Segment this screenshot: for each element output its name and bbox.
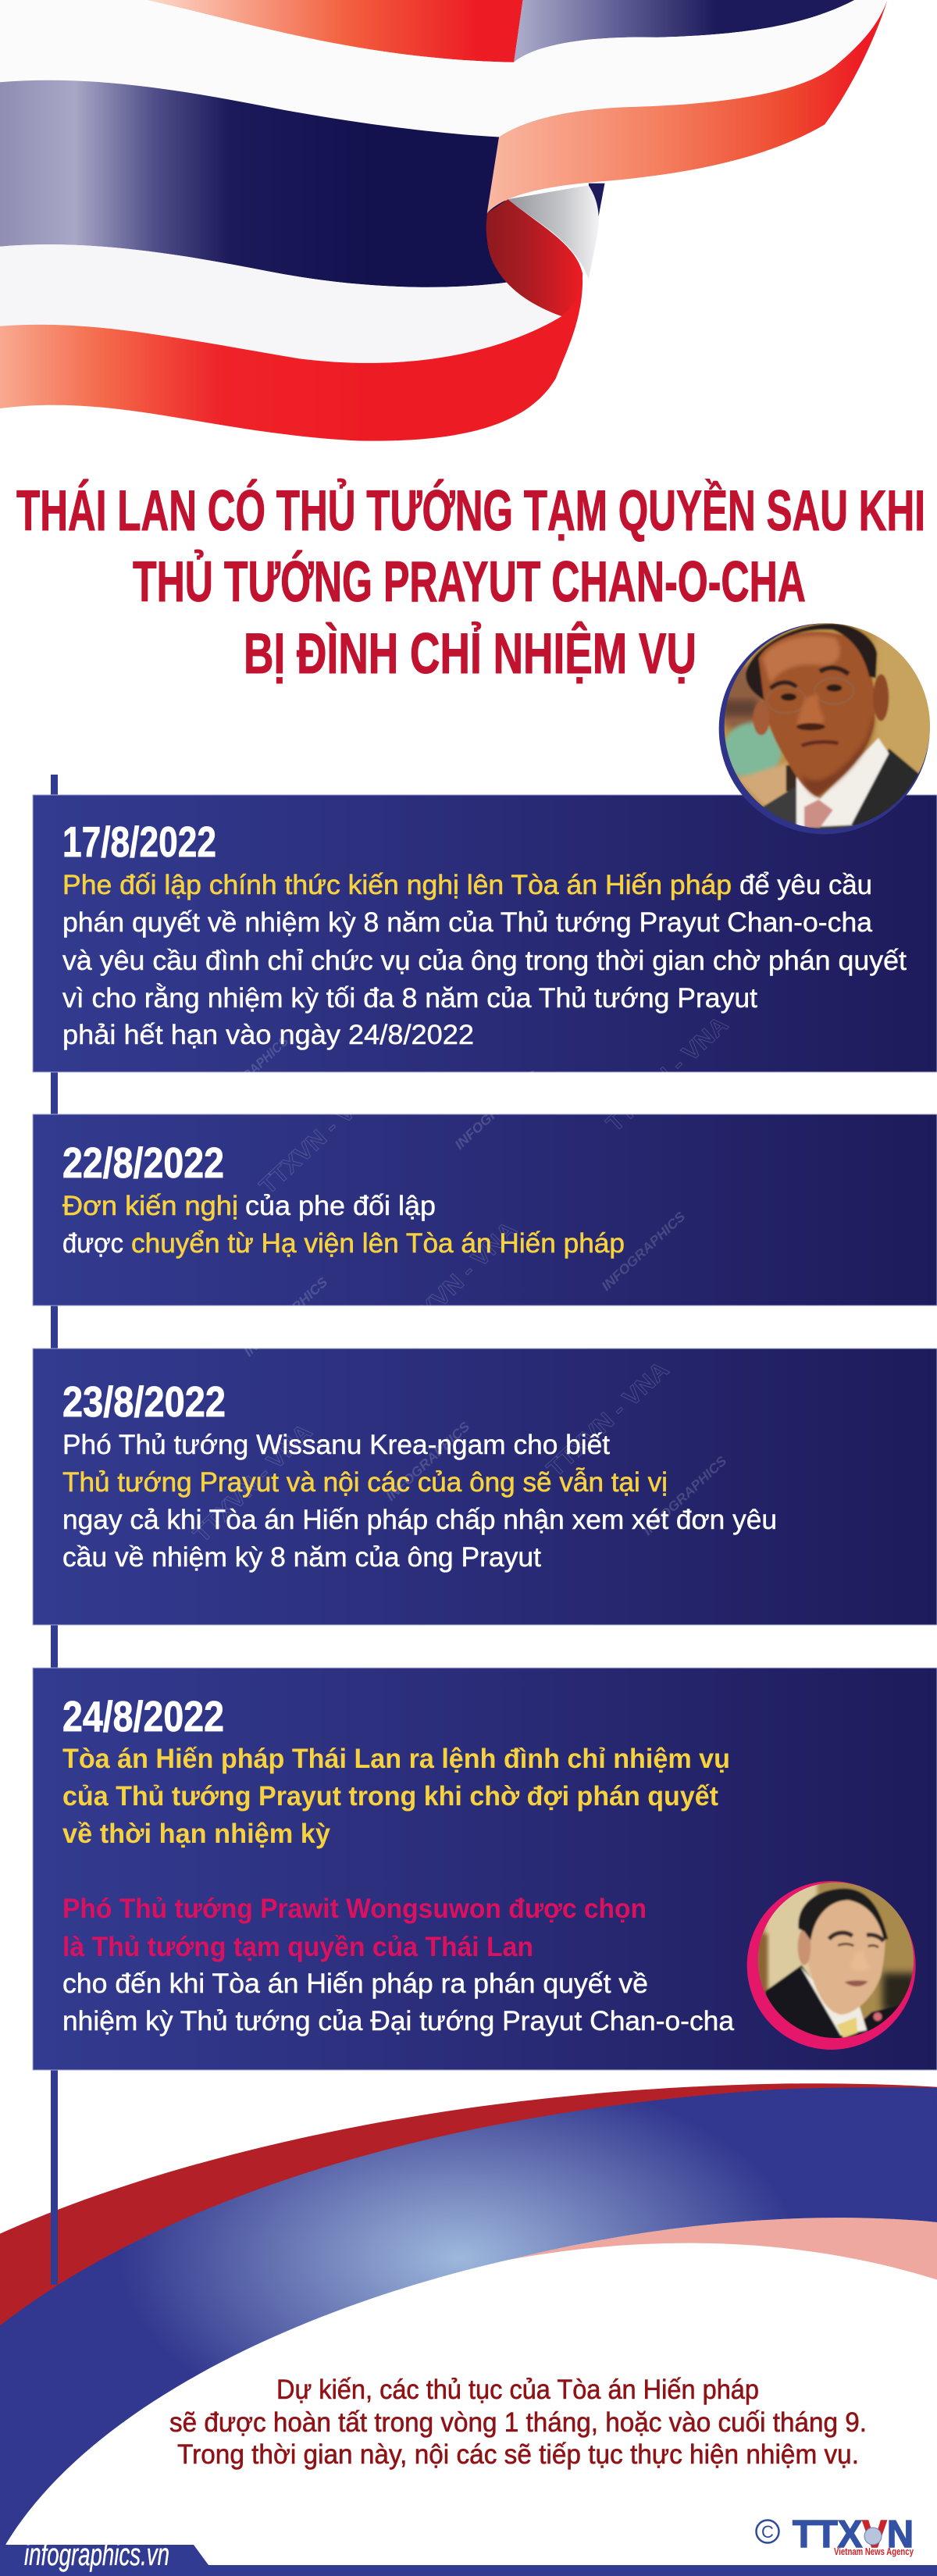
text block: ngay cả khi Tòa án Hiến pháp chấp nhận xem xét đơn yêu bbox=[62, 1505, 777, 1535]
bottom swoosh bbox=[0, 2083, 937, 2576]
footer strip and site label: infographics.vn bbox=[24, 2538, 169, 2572]
date: 24/8/2022 bbox=[62, 1692, 224, 1740]
text block: Phó Thủ tướng Wissanu Krea-ngam cho biết bbox=[62, 1430, 610, 1460]
court order text: của Thủ tướng Prayut trong khi chờ đợi phán quyết bbox=[62, 1781, 718, 1812]
panel: 22/8/2022 bbox=[33, 1114, 937, 1306]
date: 22/8/2022 bbox=[62, 1138, 224, 1187]
panel: 17/8/2022 bbox=[33, 795, 937, 1072]
text block: cầu về nhiệm kỳ 8 năm của ông Prayut bbox=[62, 1542, 541, 1573]
acting prime minister text bbox=[62, 1894, 735, 2036]
acting prime minister text: cho đến khi Tòa án Hiến pháp ra phán quyết về bbox=[62, 1969, 648, 1999]
date: 17/8/2022 bbox=[62, 818, 216, 866]
panel: 24/8/2022 bbox=[33, 1668, 937, 2070]
timeline bar bbox=[51, 775, 58, 2285]
portrait: Prayut Chan-o-cha bbox=[713, 619, 937, 836]
watermarks: INFOGRAPHICS bbox=[452, 1067, 542, 1153]
logo: TTXVN: TTXVN bbox=[793, 2514, 914, 2556]
text block: để yêu cầu bbox=[739, 870, 872, 900]
closing note: Trong thời gian này, nội các sẽ tiếp tục thực hiện nhiệm vụ. bbox=[177, 2439, 859, 2470]
court order text: Tòa án Hiến pháp Thái Lan ra lệnh đình chỉ nhiệm vụ bbox=[62, 1744, 730, 1774]
watermarks: TTXVN - VNA bbox=[601, 1012, 733, 1137]
watermarks: TTXVN - VNA bbox=[394, 1217, 522, 1345]
watermarks: INFOGRAPHICS bbox=[210, 1033, 292, 1111]
closing note: sẽ được hoàn tất trong vòng 1 tháng, hoặc vào cuối tháng 9. bbox=[169, 2407, 867, 2438]
title: BỊ ĐÌNH CHỈ NHIỆM VỤ bbox=[244, 622, 697, 686]
text block: vì cho rằng nhiệm kỳ tối đa 8 năm của Thủ tướng Prayut bbox=[62, 983, 757, 1014]
date: 23/8/2022 bbox=[62, 1377, 226, 1426]
watermarks: INFOGRAPHICS bbox=[383, 1419, 473, 1504]
text block bbox=[62, 1191, 625, 1259]
watermarks: TTXVN - VNA bbox=[189, 1419, 317, 1548]
portrait: Prawit Wongsuwon bbox=[747, 1879, 916, 2050]
text block: được bbox=[62, 1228, 123, 1259]
text block: Đơn kiến nghị bbox=[62, 1191, 238, 1221]
watermarks: INFOGRAPHICS bbox=[599, 1209, 689, 1294]
text block: phán quyết về nhiệm kỳ 8 năm của Thủ tướng Prayut Chan-o-cha bbox=[62, 907, 873, 938]
logo: TTXVN: Vietnam News Agency bbox=[834, 2546, 914, 2557]
text block: phải hết hạn vào ngày 24/8/2022 bbox=[62, 1020, 474, 1050]
text block: Thủ tướng Prayut và nội các của ông sẽ vẫn tại vị bbox=[62, 1467, 668, 1498]
acting prime minister text: nhiệm kỳ Thủ tướng của Đại tướng Prayut Chan-o-cha bbox=[62, 2006, 735, 2036]
court order text bbox=[62, 1744, 730, 1849]
acting prime minister text: là Thủ tướng tạm quyền của Thái Lan bbox=[62, 1932, 533, 1962]
footer strip and site label bbox=[0, 2538, 937, 2576]
closing note bbox=[169, 2375, 867, 2470]
decorative Thai flag bbox=[0, 0, 887, 441]
watermarks bbox=[189, 1012, 733, 1548]
watermarks: TTXVN - VNA bbox=[255, 1074, 387, 1199]
text block bbox=[62, 1430, 777, 1573]
closing note: Dự kiến, các thủ tục của Tòa án Hiến pháp bbox=[276, 2375, 759, 2405]
watermarks: TTXVN - VNA bbox=[542, 1357, 674, 1482]
text block: của phe đối lập bbox=[245, 1191, 436, 1221]
text block: chuyển từ Hạ viện lên Tòa án Hiến pháp bbox=[131, 1228, 625, 1259]
text block bbox=[62, 870, 907, 1050]
logo: TTXVN: C bbox=[761, 2522, 774, 2542]
text block: và yêu cầu đình chỉ chức vụ của ông trong thời gian chờ phán quyết bbox=[62, 946, 907, 976]
court order text: về thời hạn nhiệm kỳ bbox=[62, 1819, 331, 1849]
panel: 23/8/2022 bbox=[33, 1349, 937, 1625]
title bbox=[16, 479, 925, 686]
watermarks: INFOGRAPHICS bbox=[640, 1453, 730, 1538]
watermarks: INFOGRAPHICS bbox=[241, 1274, 331, 1359]
text block: Phe đối lập chính thức kiến nghị lên Tòa án Hiến pháp bbox=[62, 870, 732, 900]
acting prime minister text: Phó Thủ tướng Prawit Wongsuwon được chọn bbox=[62, 1894, 647, 1924]
